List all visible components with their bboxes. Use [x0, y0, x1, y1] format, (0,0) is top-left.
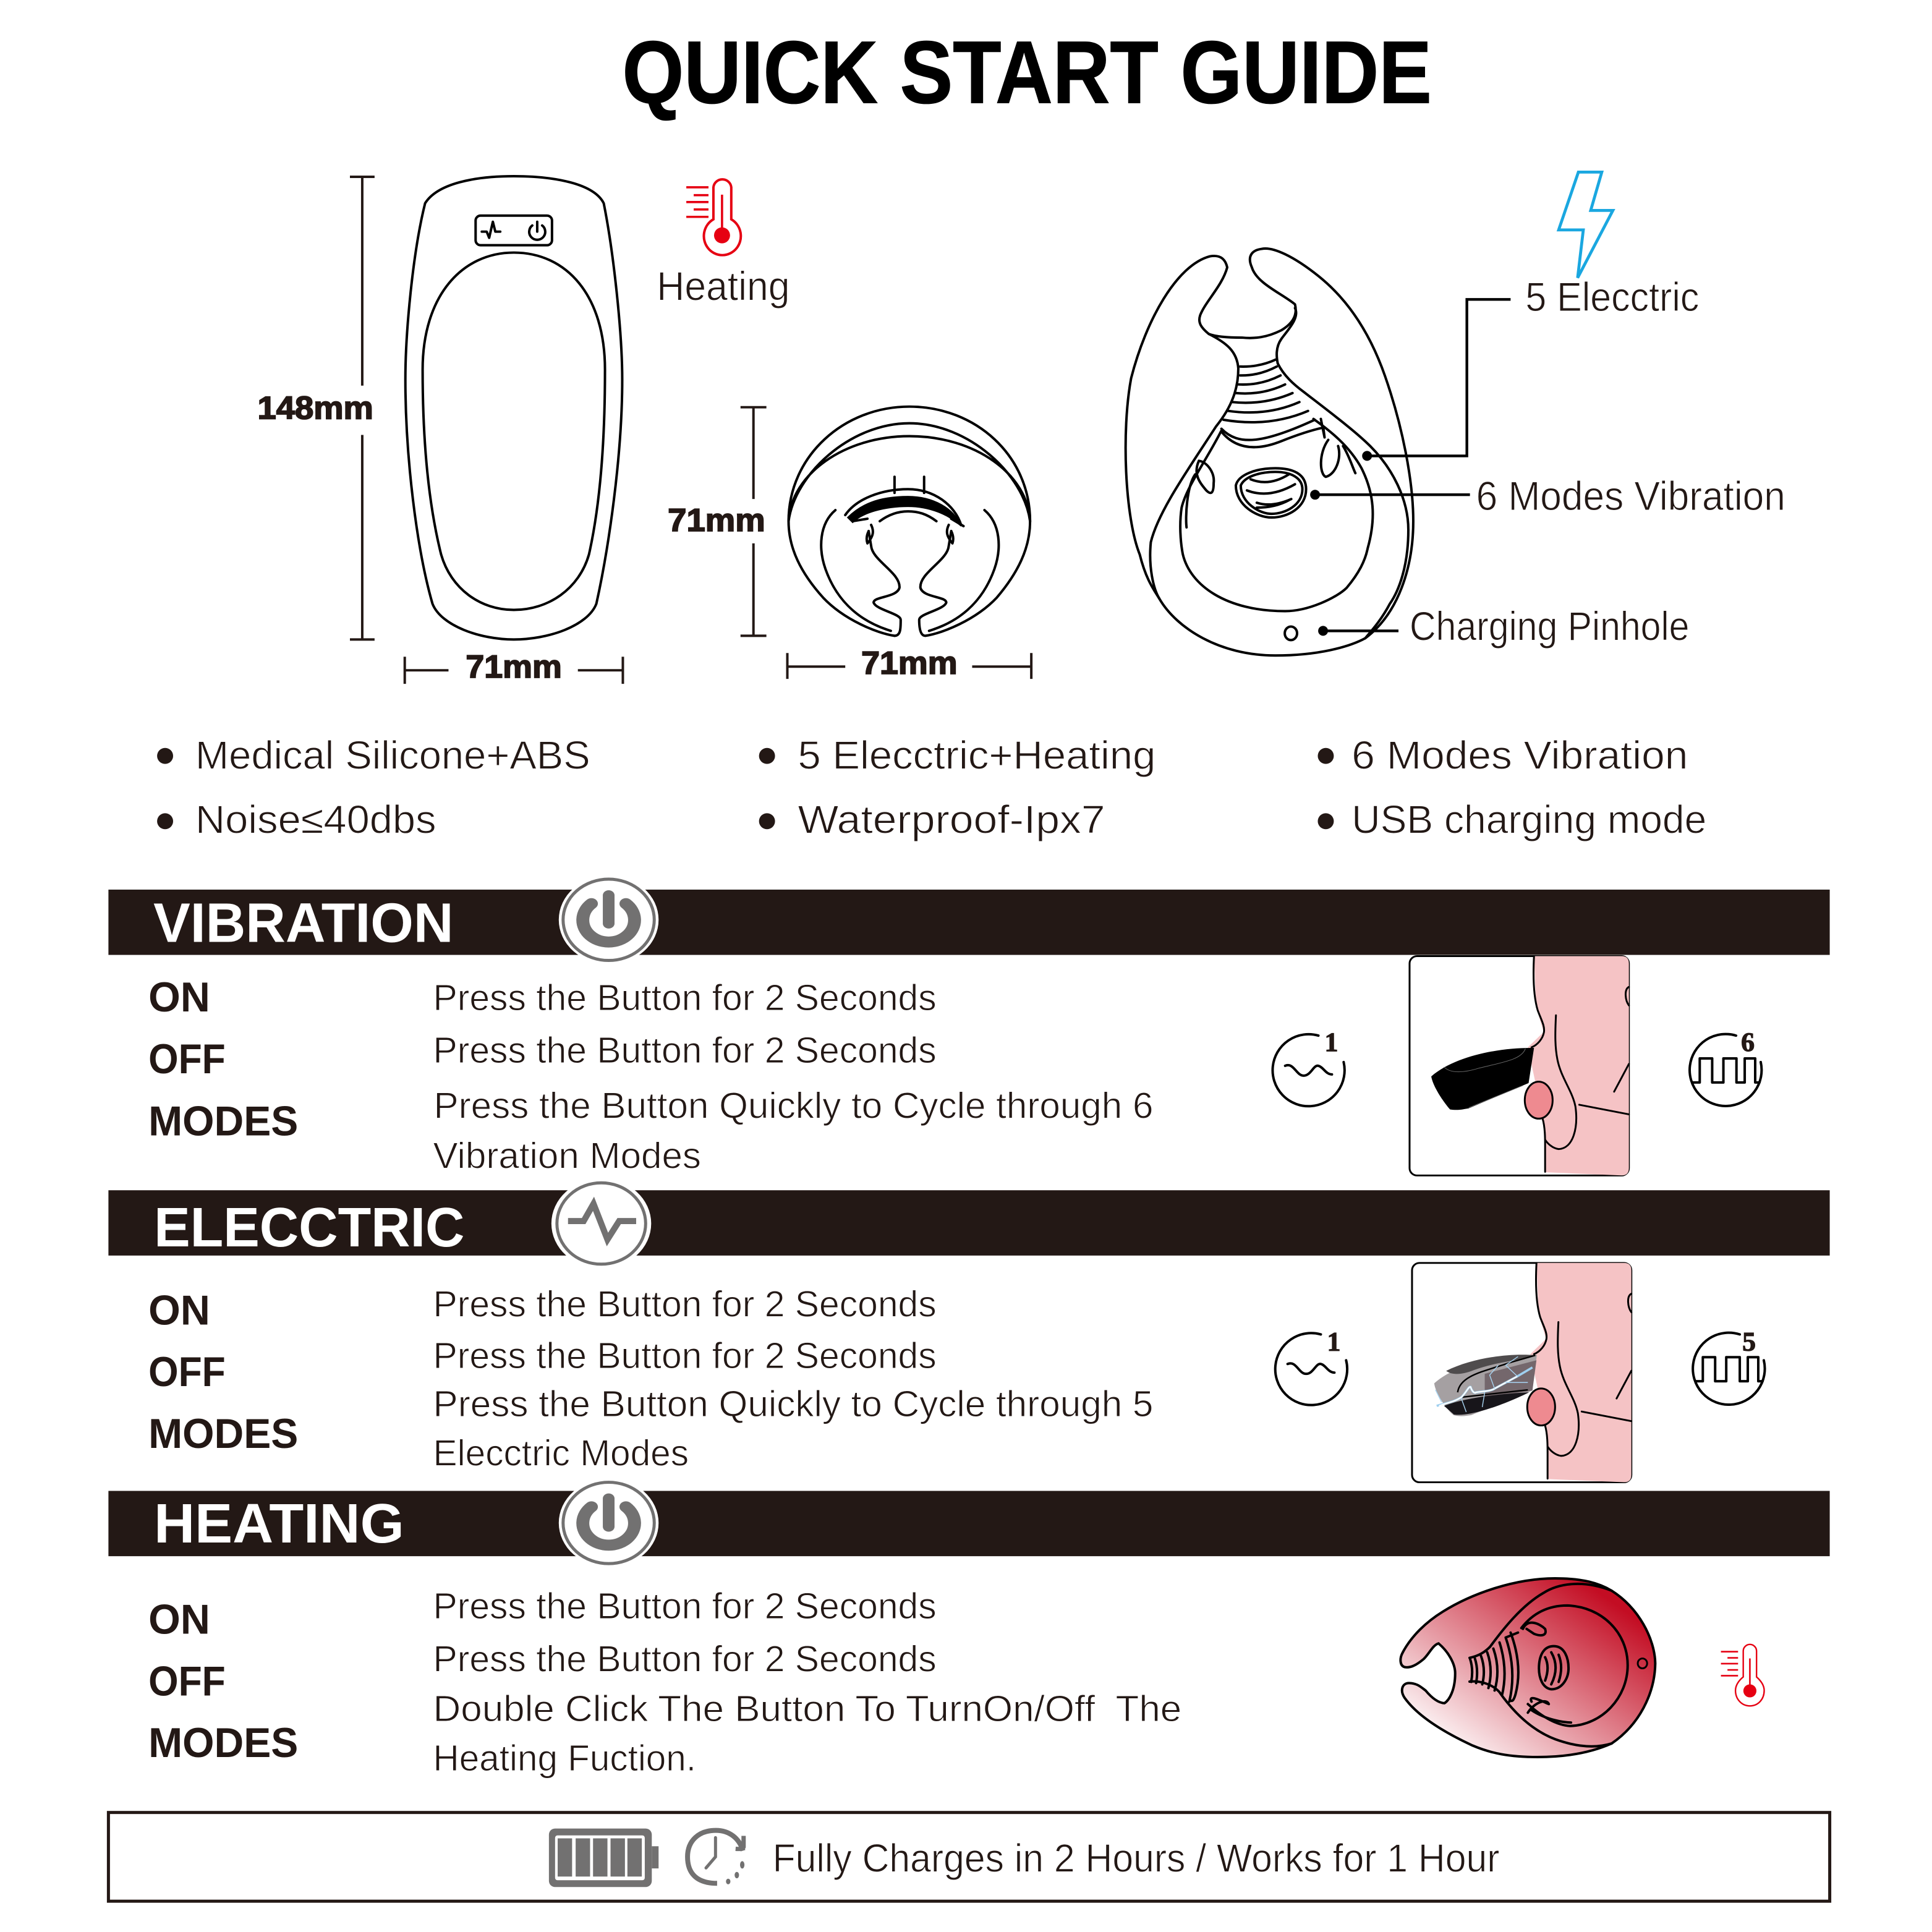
icon: heating thermometer [686, 179, 741, 255]
labels: OFF [148, 1658, 226, 1704]
instructions: Press the Button Quickly to Cycle through 6 [434, 1085, 1153, 1126]
labels [148, 1597, 298, 1766]
labels: OFF [148, 1349, 226, 1395]
callout: 6 Modes Vibration [1310, 473, 1785, 519]
device outer body [406, 176, 622, 639]
dimension: 71mm width, front view: 71mm [466, 649, 562, 684]
labels [148, 1287, 298, 1457]
neck and ring outline [1150, 308, 1408, 638]
callout: 5 Elecctric [1362, 274, 1699, 461]
control buttons [475, 216, 552, 245]
instructions: Vibration Modes [433, 1134, 701, 1176]
instructions: Press the Button for 2 Seconds [433, 1638, 937, 1679]
charging text: Fully Charges in 2 Hours / Works for 1 Hour [773, 1836, 1499, 1880]
labels: ON [148, 1287, 210, 1334]
instructions: Double Click The Button To TurnOn/Off The [433, 1688, 1181, 1729]
callout: 6 Modes Vibration: 6 Modes Vibration [1476, 473, 1785, 519]
instructions: Elecctric Modes [433, 1432, 689, 1474]
nozzle arch [848, 496, 960, 525]
side knobs [1186, 440, 1355, 527]
instructions: Heating Fuction. [433, 1737, 696, 1779]
icon: pulse wave level 6 [1690, 1028, 1761, 1106]
illustration: heated device [1400, 1578, 1655, 1757]
labels: MODES [148, 1411, 298, 1457]
dimension: 71mm height, end view [668, 407, 767, 636]
icon: pulse wave level 5 [1693, 1327, 1765, 1405]
heading bar: vibration [108, 890, 1830, 955]
labels: OFF [148, 1036, 226, 1083]
icon: pulse wave level 6: 6 [1741, 1028, 1755, 1057]
icon: pulse wave level 5: 5 [1742, 1327, 1756, 1356]
charging pinhole [1285, 626, 1297, 640]
callout: Charging Pinhole: Charging Pinhole [1410, 603, 1689, 649]
illustration: device on body with electric effect [1412, 1263, 1632, 1483]
panel: vibration [108, 875, 1830, 1176]
instructions: Press the Button for 2 Seconds [433, 1029, 937, 1071]
side view device diagram [1126, 249, 1413, 655]
neck ridges [1222, 360, 1315, 440]
inner hoof curves [821, 510, 998, 631]
device inner panel [423, 253, 605, 610]
top arcs [789, 423, 1030, 521]
panel: charging info [108, 1813, 1830, 1901]
labels: MODES [148, 1720, 298, 1766]
icon: thermometer [1721, 1645, 1764, 1706]
illustration: device on body [1410, 956, 1629, 1175]
heading: ELECCTRIC: ELECCTRIC [154, 1197, 464, 1259]
instructions: Press the Button Quickly to Cycle through 5 [433, 1383, 1153, 1424]
icon: sine wave level 1 [1275, 1327, 1347, 1405]
instructions: Press the Button for 2 Seconds [433, 1283, 937, 1325]
icon: blue lightning bolt [1559, 172, 1613, 278]
heating label: Heating [657, 263, 790, 309]
icon: sine wave level 1 [1272, 1028, 1345, 1106]
title: QUICK START GUIDE [622, 23, 1432, 122]
panel: electric [108, 1178, 1830, 1483]
dimension: 148mm height [258, 176, 375, 639]
icon: sine wave level 1: 1 [1324, 1028, 1338, 1057]
inner circle [1180, 419, 1372, 611]
dimension: 71mm width, end view: 71mm [861, 645, 958, 681]
icon: sine wave level 1: 1 [1327, 1327, 1340, 1356]
feature list column 1: Noise≤40dbs [195, 797, 436, 841]
heading: VIBRATION: VIBRATION [153, 893, 453, 955]
callout: 5 Elecctric: 5 Elecctric [1525, 274, 1699, 320]
labels: MODES [148, 1099, 298, 1145]
feature list column 3 [1317, 733, 1706, 841]
end view device diagram [789, 407, 1030, 636]
feature list column 1: Medical Silicone+ABS [195, 733, 590, 778]
center blob [1236, 468, 1306, 517]
front view device diagram [406, 176, 622, 639]
instructions: Press the Button for 2 Seconds [433, 1585, 937, 1627]
feature list column 1 [157, 733, 590, 841]
panel: heating [108, 1479, 1830, 1779]
instructions [433, 977, 1153, 1176]
instructions [433, 1283, 1153, 1474]
callout: Charging Pinhole [1318, 603, 1689, 649]
icon: power button [559, 875, 658, 964]
outer shell [789, 407, 1030, 636]
heading: HEATING: HEATING [154, 1493, 404, 1555]
outer body [1126, 249, 1413, 655]
feature list column 3: USB charging mode [1351, 797, 1706, 841]
feature list column 2 [759, 733, 1155, 841]
labels: ON [148, 1597, 210, 1643]
heading bar: electric [108, 1190, 1830, 1256]
feature list column 2: Waterproof-Ipx7 [798, 797, 1105, 841]
heading bar: heating [108, 1491, 1830, 1556]
dimension: 148mm height: 148mm [258, 390, 373, 426]
instructions: Press the Button for 2 Seconds [433, 1335, 937, 1376]
labels [148, 974, 298, 1145]
instructions: Press the Button for 2 Seconds [433, 977, 937, 1018]
icon: battery [549, 1829, 658, 1887]
dimension: 71mm width, front view [404, 649, 623, 684]
icon: clock [687, 1831, 744, 1884]
instructions [433, 1585, 1181, 1779]
dimension: 71mm width, end view [788, 645, 1031, 681]
labels: ON [148, 974, 210, 1021]
feature list column 2: 5 Elecctric+Heating [798, 733, 1155, 778]
icon: pulse button [551, 1178, 651, 1269]
feature list column 3: 6 Modes Vibration [1351, 733, 1688, 778]
dimension: 71mm height, end view: 71mm [668, 502, 765, 538]
icon: power button [559, 1479, 658, 1567]
